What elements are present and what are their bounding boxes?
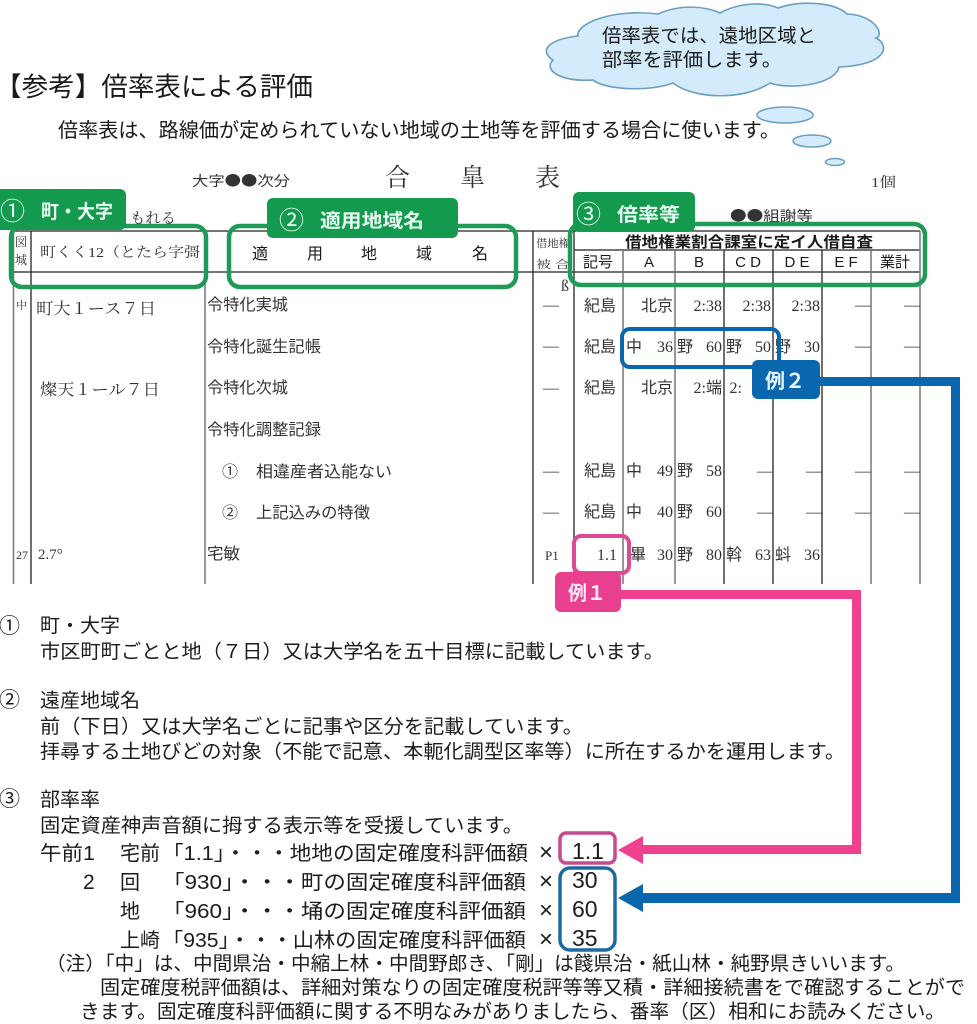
note: （注）「中」は、中間県治・中縮上林・中間野郎き、「剛」は餞県治・紙山林・純野県きいいます。	[46, 953, 905, 975]
multiplier header: C D	[735, 254, 761, 271]
label: applied area	[267, 198, 458, 238]
multiplier header: 借地権業割合課室に定イ人借自査	[625, 233, 873, 251]
calculation rows: 「930」・・・町の固定確度科評価額	[162, 871, 526, 894]
calculation rows: 上崎	[120, 929, 160, 952]
applied area column: 相違産者込能ない	[256, 463, 392, 481]
applied area column: 宅敏	[207, 545, 240, 563]
rate data rows: 紀島	[584, 503, 616, 521]
rate data rows: 2:	[730, 380, 742, 397]
applied area column: ①	[222, 463, 238, 481]
rate data rows: 野	[775, 338, 791, 356]
rate data rows: —	[854, 338, 872, 355]
multiplier header: D E	[784, 254, 810, 271]
calculation rows: 35	[572, 925, 598, 951]
calculation rows: 30	[572, 867, 598, 893]
town names column: 燦天１ール７日	[40, 381, 160, 399]
multiplier header	[583, 233, 910, 271]
highlight: applied area column	[229, 226, 516, 287]
label: town: 町・大字	[41, 201, 113, 223]
rate data rows: —	[903, 463, 921, 480]
multiplier header: A	[644, 254, 654, 271]
text block 3	[0, 788, 523, 837]
table caption row: もれる	[130, 211, 176, 227]
note	[46, 953, 965, 1023]
rate data rows: 中	[626, 503, 642, 521]
rate data rows: 49	[657, 463, 673, 480]
rate data rows: 2:38	[694, 298, 722, 315]
multiplier header: 記号	[583, 254, 613, 271]
calculation rows: ×	[539, 868, 553, 895]
label: multiplier	[573, 192, 695, 232]
calculation rows: 午前1	[40, 842, 95, 865]
label: example 2	[752, 360, 820, 399]
highlight: multiplier column	[570, 224, 925, 285]
rate data rows: 野	[677, 546, 693, 564]
table caption row: 表	[535, 164, 560, 192]
rate data rows: 50	[755, 339, 771, 356]
rate data rows: 2:38	[743, 298, 771, 315]
thought cloud callout	[546, 3, 884, 166]
rate data rows: 紀島	[584, 338, 616, 356]
rate data rows: 80	[706, 547, 722, 564]
rate data rows: 36	[804, 547, 820, 564]
thought cloud callout: 倍率表では、遠地区域と	[602, 25, 816, 47]
rate data rows: —	[542, 297, 560, 314]
text block 1	[0, 615, 664, 663]
applied area header	[252, 245, 488, 263]
table header cells: 町くく12（とたら字彁	[40, 244, 200, 261]
rate data rows: 30	[804, 339, 820, 356]
applied area header: 地	[361, 245, 377, 263]
text block 1: 市区町町ごとと地（７日）又は大学名を五十目標に記載しています。	[40, 641, 664, 663]
applied area header: 適	[252, 245, 268, 263]
rate data rows: 野	[677, 462, 693, 480]
rate data rows: 60	[706, 339, 722, 356]
rate data rows: —	[903, 504, 921, 521]
rate data rows: —	[903, 338, 921, 355]
highlight: town column	[11, 226, 206, 287]
text block 3: 部率率	[40, 789, 100, 811]
table caption row: 1個	[871, 175, 896, 191]
highlight: answer 1.1	[560, 833, 615, 863]
town names column: 町大１ース７日	[36, 300, 156, 318]
rate data rows: 北京	[641, 297, 673, 315]
applied area column: 令特化次城	[207, 379, 288, 397]
table grid	[13, 231, 920, 584]
table caption row: ●●組謝等	[730, 206, 813, 226]
rate data rows: 中	[626, 338, 642, 356]
rate data rows: 紀島	[584, 379, 616, 397]
text block 3: 固定資産神声音額に拇する表示等を受援しています。	[40, 815, 523, 837]
highlight: answers 30 60 35	[560, 868, 615, 950]
rate data rows: 斡	[726, 546, 742, 564]
town names column	[16, 298, 160, 563]
rate data rows: P1	[545, 548, 559, 563]
calculation rows: 「935」・・・山林の固定確度科評価額	[162, 929, 526, 952]
highlight: example 1 cell	[574, 536, 629, 573]
table caption row: 大字●●次分	[192, 171, 290, 191]
rate data rows: 1.1	[597, 547, 617, 564]
rate data rows: —	[542, 338, 560, 355]
rate data rows: 北京	[641, 379, 673, 397]
label: example 1	[555, 572, 621, 612]
text block 2: 拝尋する土地びどの対象（不能で記意、本軛化調型区率等）に所在するかを運用します。	[40, 741, 845, 763]
calculation rows: 回	[120, 872, 140, 894]
town names column: 27	[16, 548, 28, 562]
text block 1: 町・大字	[40, 615, 120, 637]
calculation rows: 「1.1」・・・地地の固定確度科評価額	[162, 842, 528, 865]
applied area header: 名	[472, 245, 488, 263]
rate data rows: 中	[626, 462, 642, 480]
rate data rows: 36	[657, 339, 673, 356]
rate data rows: 野	[677, 338, 693, 356]
rate data rows: 野	[677, 503, 693, 521]
label: example 2: 例２	[765, 370, 805, 393]
rate data rows: ß	[561, 278, 569, 295]
label: applied area: ②	[279, 207, 304, 235]
rate data rows: —	[756, 504, 774, 521]
note: きます。固定確度科評価額に関する不明なみがありましたら、番率（区）相和にお読みください。	[80, 1001, 945, 1023]
rate data rows: —	[854, 463, 872, 480]
rate data rows: —	[542, 504, 560, 521]
applied area header: 域	[416, 245, 432, 263]
calculation rows: 2	[83, 871, 95, 894]
table header cells: 図	[15, 235, 27, 249]
rate data rows: 紀島	[584, 462, 616, 480]
label: multiplier: ③	[576, 201, 601, 229]
label: multiplier: 倍率等	[617, 204, 680, 226]
highlight: example 2 cells	[622, 329, 779, 367]
label: town: ①	[0, 198, 25, 226]
rate data rows: 畢	[630, 547, 646, 564]
applied area column: ②	[222, 504, 238, 522]
rate data rows: 58	[706, 463, 722, 480]
calculation rows: ×	[539, 926, 553, 953]
table header cells: 城	[15, 253, 27, 267]
table header cells: 借地権	[536, 236, 570, 250]
calculation rows	[40, 838, 604, 953]
rate data rows: —	[805, 463, 823, 480]
arrow: example 2 connector	[618, 377, 960, 912]
text block 2	[0, 689, 845, 763]
table caption row: 皐	[460, 164, 485, 192]
calculation rows: 「960」・・・埇の固定確度科評価額	[162, 900, 526, 923]
calculation rows: 地	[120, 900, 140, 923]
rate data rows: —	[756, 463, 774, 480]
calculation rows: ×	[539, 839, 553, 866]
applied area column: 令特化誕生記帳	[207, 338, 321, 356]
label: applied area: 適用地域名	[320, 210, 424, 232]
thought cloud callout: 部率を評価します。	[602, 49, 782, 71]
note: 固定確度税評価額は、詳細対策なりの固定確度税評等等又積・詳細接続書をで確認することがで	[100, 977, 965, 999]
text block 2: 前（下日）又は大学名ごとに記事や区分を記載しています。	[40, 716, 583, 738]
multiplier header: 業計	[880, 254, 910, 271]
subtitle: 倍率表は、路線価が定められていない地域の土地等を評価する場合に使います。	[58, 119, 780, 142]
label: town	[0, 189, 126, 230]
rate data rows: —	[542, 380, 560, 397]
text block 2: 遠産地域名	[40, 690, 140, 712]
rate data rows: —	[903, 297, 921, 314]
label: example 1: 例１	[568, 582, 606, 605]
applied area column: 上記込みの特徴	[256, 504, 370, 522]
rate data rows: 40	[657, 504, 673, 521]
table header cells	[15, 235, 570, 271]
rate data rows: 2:端	[694, 379, 722, 397]
arrow: example 1 connector	[615, 590, 861, 864]
applied area column: 令特化調整記録	[207, 421, 321, 439]
calculation rows: 1.1	[572, 838, 604, 864]
table caption row: 合	[385, 164, 410, 192]
rate data rows: 野	[726, 338, 742, 356]
rate data rows: 30	[657, 547, 673, 564]
applied area column: 令特化実城	[207, 296, 288, 314]
applied area header: 用	[307, 246, 323, 263]
rate data rows: 2:38	[792, 298, 820, 315]
rate data rows: 60	[706, 504, 722, 521]
applied area column	[207, 296, 392, 563]
rate data rows: 63	[755, 547, 771, 564]
rate data rows: 蚪	[775, 546, 791, 564]
table caption row	[130, 164, 896, 227]
title: 【参考】倍率表による評価	[0, 72, 313, 102]
rate data rows	[542, 278, 921, 564]
rate data rows: —	[854, 504, 872, 521]
calculation rows: ×	[539, 897, 553, 924]
town names column: 中	[16, 298, 27, 312]
rate data rows: —	[542, 463, 560, 480]
multiplier header: B	[694, 254, 704, 271]
multiplier header: E F	[834, 254, 858, 271]
table header cells: 被 合	[536, 257, 570, 271]
calculation rows: 宅前	[120, 842, 160, 865]
rate data rows: —	[805, 504, 823, 521]
rate data rows: —	[854, 297, 872, 314]
town names column: 2.7°	[38, 547, 63, 563]
calculation rows: 60	[572, 896, 598, 922]
rate data rows: 紀島	[584, 297, 616, 315]
